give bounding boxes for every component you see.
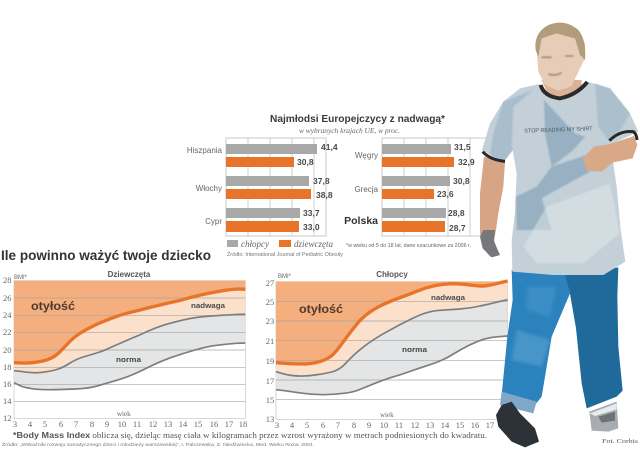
x axis labels girls: 11 [133,419,141,429]
x axis labels boys: 15 [456,420,464,430]
panel: left bar chart: 41,4 [321,142,338,152]
left hand shadow [480,230,500,257]
left shoe [496,402,539,447]
label: obesity zone girls: otyłość [31,301,76,313]
x axis labels girls: 15 [194,419,202,429]
x axis labels boys: 12 [411,420,419,430]
x axis labels boys: 6 [321,420,325,430]
x axis labels boys: 8 [352,420,356,430]
right shoe [589,402,618,432]
x axis labels girls: 16 [210,419,218,429]
y axis labels girls: 20 [3,345,12,355]
label: normal zone boys: norma [402,347,427,354]
x axis labels girls [13,419,247,429]
y axis labels boys: 23 [266,316,274,326]
y axis labels boys: 25 [266,297,274,307]
BMI definition note: *Body Mass Index oblicza się, dzieląc masę ciała w kilogramach przez wzrost wyrażony w metrach podniesionych do kwadratu. [13,430,487,440]
left arm [480,157,505,257]
plot: boys curves [276,281,508,419]
chart: girls BMI [3,270,247,429]
y axis labels boys: 17 [266,376,274,386]
x axis labels girls: 18 [239,419,247,429]
y axis labels girls: 24 [3,310,12,320]
chart title: girls: Dziewczęta [108,270,151,279]
x axis labels boys [275,420,509,430]
x axis labels girls: 3 [13,419,17,429]
t-shirt sleeve bands [483,152,505,161]
panel: left bar chart: 33,7 [303,208,320,218]
jeans [502,270,570,405]
main heading: Ile powinno ważyć twoje dziecko [1,247,211,263]
right arm [583,136,637,172]
neck [542,80,582,97]
label: normal zone girls: norma [116,357,141,364]
x axis labels girls: 17 [225,419,233,429]
x axis labels boys: 10 [380,420,388,430]
x axis labels boys: 17 [486,420,494,430]
x axis labels girls: 6 [59,419,63,429]
y axis labels boys: 19 [266,356,274,366]
x axis labels boys: 13 [426,420,434,430]
axis caption: BMI girls: BMI* [14,275,28,281]
x axis labels girls: 4 [28,419,33,429]
panel: right bar chart: 28,7 [449,223,466,233]
x axis labels girls: 7 [74,419,78,429]
t-shirt [482,82,638,275]
x axis labels girls: 14 [179,419,188,429]
x axis labels boys: 16 [471,420,479,430]
collar [541,82,587,98]
panel: right bar chart: Polska [344,215,378,227]
y axis labels girls: 18 [3,362,12,372]
bar chart heading: w wybranych krajach UE, w proc. [299,127,400,135]
bar chart heading: Najmłodsi Europejczycy z nadwagą* [270,113,446,125]
x axis labels girls: 5 [43,419,47,429]
label: age axis girls: wiek [117,410,131,418]
legend [227,239,333,249]
y axis labels boys: 21 [266,336,274,346]
eyes and mouth [542,56,573,75]
panel: left bar chart: 38,8 [316,190,333,200]
panel: right bar chart: Węgry [355,151,378,160]
x axis labels girls: 8 [90,419,94,429]
y axis labels girls: 12 [3,413,12,423]
y axis labels boys: 15 [266,395,274,405]
y axis labels girls: 26 [3,293,12,303]
t-shirt slogan: STOP READING MY SHIRT [524,126,593,135]
plot: girls curves [14,281,245,418]
photo: boy walking [480,23,638,447]
y axis labels boys: 13 [266,414,274,424]
y axis labels girls: 28 [3,275,12,285]
panel: right bar chart: 23,6 [437,189,454,199]
chart: boys BMI [266,270,509,430]
label: obesity zone boys: otyłość [299,304,344,316]
panel: left bar chart: 30,8 [297,157,314,167]
x axis labels boys: 9 [367,420,371,430]
panel: left bar chart: 33,0 [303,222,320,232]
x axis labels boys: 4 [290,420,295,430]
y axis labels boys [266,278,274,424]
x axis labels boys: 5 [305,420,309,430]
panel: left bar chart: Hiszpania [187,146,223,155]
source: BMI charts: Źródło: „Wskaźniki rozwoju somatycznego dzieci i młodzieży warszawskiej”, I. Palczewska, Z. Niedźwiecka, Med. Wieku Rozw. 2001 [2,441,313,448]
panel: left bar chart: 37,8 [313,176,330,186]
panel: right bar chart: 32,9 [458,157,475,167]
label: age axis boys: wiek [380,411,394,419]
bar chart heading [270,113,446,135]
panel: right bar chart [344,138,492,236]
panel: right bar chart: Grecja [354,185,379,194]
x axis labels boys: 7 [336,420,340,430]
x axis labels boys: 18 [501,420,509,430]
panel: right bar chart: 31,5 [454,142,471,152]
panel: left bar chart: Włochy [196,184,222,193]
panel: right bar chart: 30,8 [453,176,470,186]
panel: left bar chart: Cypr [205,217,222,226]
hair [535,23,585,60]
label: overweight zone boys: nadwaga [431,295,465,302]
photo credit: Fot. Corbis [602,438,639,445]
x axis labels boys: 3 [275,420,279,430]
y axis labels girls: 14 [3,396,12,406]
y axis labels girls [3,275,12,423]
y axis labels girls: 22 [3,327,12,337]
x axis labels girls: 9 [105,419,109,429]
panel: right bar chart: 28,8 [448,208,465,218]
label: overweight zone girls: nadwaga [191,303,225,310]
source: bar chart: Źródło: International Journal of Pediatric Obesity [227,251,343,258]
axis caption: BMI boys: BMI* [278,274,292,280]
t-shirt shadows [490,83,630,263]
chart title: boys: Chłopcy [376,270,408,279]
head [536,27,585,91]
x axis labels girls: 12 [149,419,157,429]
x axis labels girls: 10 [118,419,126,429]
x axis labels girls: 13 [164,419,172,429]
legend: dziewczęta [294,239,333,249]
y axis labels boys: 27 [266,278,274,288]
panel: left bar chart [187,138,338,236]
y axis labels girls: 16 [3,379,12,389]
x axis labels boys: 14 [441,420,450,430]
legend: chłopcy [241,239,269,249]
x axis labels boys: 11 [395,420,403,430]
footnote: age range: *w wieku od 5 do 18 lat, dane szacunkowe za 2006 r. [346,243,471,249]
